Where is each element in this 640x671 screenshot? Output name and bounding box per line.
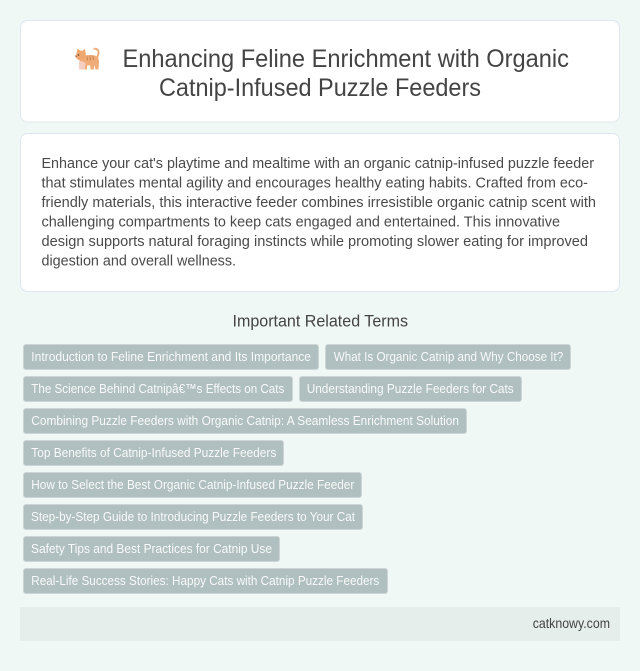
tag list (24, 344, 570, 594)
tag: what is organic catnip: What Is Organic Catnip and Why Choose It? (334, 349, 563, 364)
text block: description: Enhance your cat's playtime and mealtime with an organic catnip-infused puzzle feeder (42, 155, 594, 172)
footer (20, 607, 620, 641)
text block: description: that stimulates mental agility and encourages healthy eating habits. Crafted from eco- (42, 174, 588, 191)
title: Catnip-Infused Puzzle Feeders (159, 74, 481, 102)
text block: description (42, 155, 596, 269)
heading: related terms: Important Related Terms (232, 313, 408, 331)
panel: description (20, 134, 620, 292)
tag: success stories (24, 568, 388, 594)
title (122, 45, 569, 102)
tag: combining (24, 408, 466, 434)
text block: description: challenging compartments to keep cats engaged and entertained. This innovative (42, 213, 560, 230)
title: Enhancing Feline Enrichment with Organic (122, 45, 569, 73)
tag: how to select (24, 472, 362, 498)
text block: description: friendly materials, this interactive feeder combines irresistible organic catnip scent with (42, 194, 596, 211)
tag: understanding puzzle feeders (300, 376, 522, 402)
tag: top benefits: Top Benefits of Catnip-Infused Puzzle Feeders (31, 445, 277, 460)
tag: step by step: Step-by-Step Guide to Introducing Puzzle Feeders to Your Cat (31, 509, 355, 524)
tag: introduction (24, 344, 318, 370)
tag: understanding puzzle feeders: Understanding Puzzle Feeders for Cats (307, 381, 514, 396)
tag: step by step (24, 504, 362, 530)
tag: the science: The Science Behind Catnipâ€™s Effects on Cats (31, 381, 285, 396)
tag: introduction: Introduction to Feline Enrichment and Its Importance (31, 349, 311, 364)
footer: site name: catknowy.com (533, 616, 610, 631)
text block: description: design supports natural foraging instincts while promoting slower eating for improved (42, 233, 588, 250)
tag: safety tips: Safety Tips and Best Practices for Catnip Use (31, 541, 272, 556)
icon: cat (75, 48, 100, 70)
tag: success stories: Real-Life Success Stories: Happy Cats with Catnip Puzzle Feeders (31, 573, 380, 588)
tag: the science (24, 376, 292, 402)
text block: description: digestion and overall wellness. (42, 252, 236, 269)
tag: safety tips (24, 536, 280, 562)
tag: combining: Combining Puzzle Feeders with Organic Catnip: A Seamless Enrichment Solution (31, 413, 459, 428)
tag: how to select: How to Select the Best Organic Catnip-Infused Puzzle Feeder (31, 477, 355, 492)
tag: what is organic catnip (326, 344, 570, 370)
panel: title card (20, 20, 620, 122)
tag: top benefits (24, 440, 284, 466)
